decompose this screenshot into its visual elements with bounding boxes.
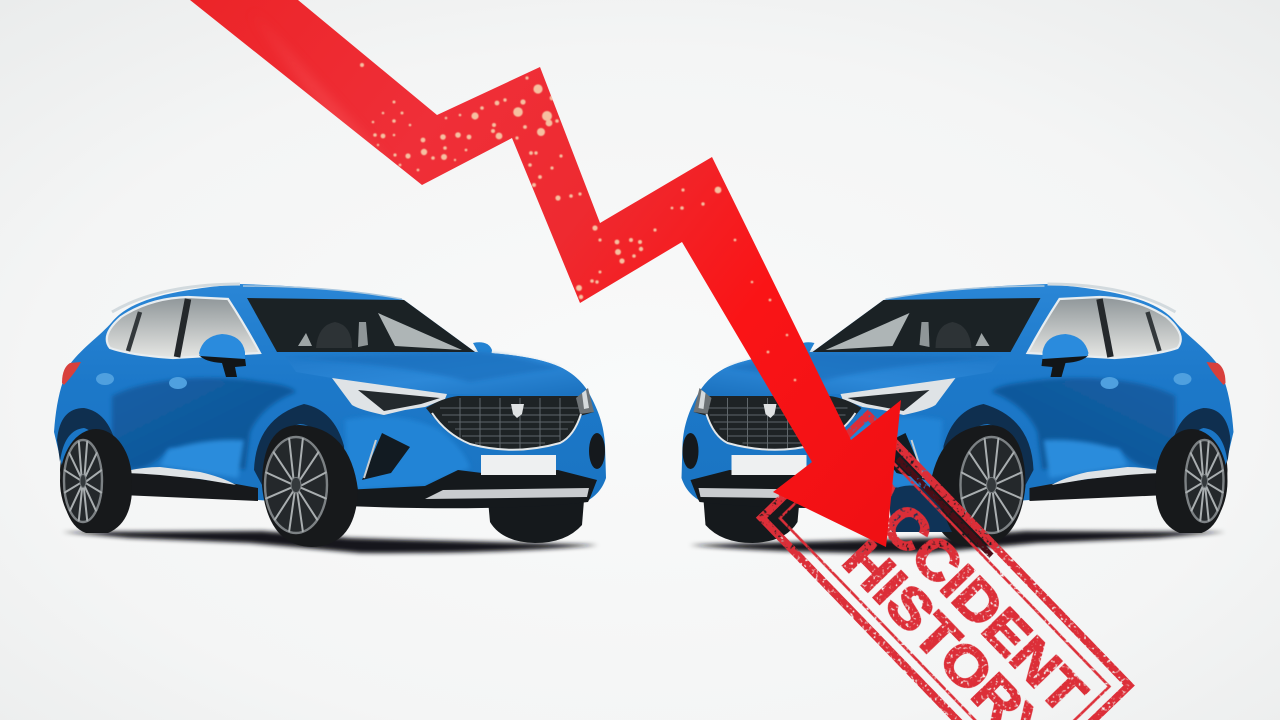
arrow: falling red zigzag value arrow [190,0,901,547]
stamp text: accident: ACCIDENT [840,460,1099,720]
car: right blue SUV (mirrored) [682,284,1234,553]
stamp inner border [780,435,1109,720]
crumpled bumper patch on the right car [888,485,952,532]
car: left blue SUV [54,284,606,553]
stamp dark overprint on the car [898,459,991,556]
stamp: accident history [762,415,1129,720]
stamp outer border [762,415,1129,720]
